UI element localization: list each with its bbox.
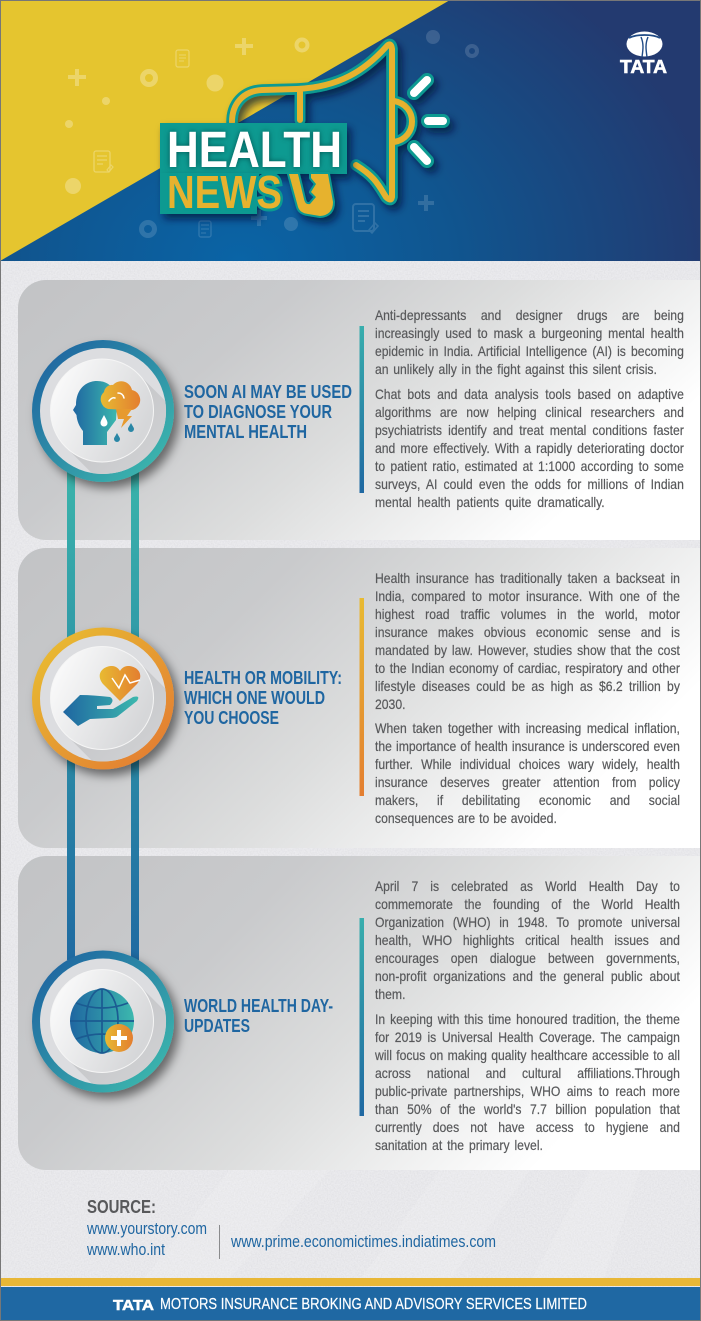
text: mobility paragraph 2: When taken together with increasing medical inflation, <box>375 720 680 736</box>
text: mental health paragraph 2: psychiatrists identify and treat mental conditions faster <box>375 422 684 438</box>
text: world health day paragraph 2: In keeping with this time honoured tradition, the theme <box>375 1011 680 1027</box>
text: mental health paragraph 1: epidemic in India. Artificial Intelligence (AI) is becoming <box>375 343 684 359</box>
text: world health day paragraph 1: commemorate the founding of the World Health <box>375 896 680 912</box>
text: world health day paragraph 2: than 50% of the world's 7.7 billion population that <box>375 1101 680 1117</box>
icon: head with storm cloud <box>73 381 140 445</box>
decorative icons on yellow <box>65 38 308 194</box>
icon: globe with plus <box>70 989 134 1053</box>
text: mobility paragraph 2: further. While individual choices wary widely, health <box>375 756 680 772</box>
badge: health or mobility <box>32 598 364 796</box>
heading: health or mobility: YOU CHOOSE <box>184 708 279 728</box>
text: mobility paragraph 1 <box>375 570 680 712</box>
text: world health day paragraph 1: non-profit organizations and the general public about <box>375 968 680 984</box>
header banner background <box>0 0 701 261</box>
text: mental health paragraph 2: and more effectively. With a rapidly deteriorating doctor <box>375 440 684 456</box>
heading: world health day: WORLD HEALTH DAY- <box>184 996 333 1016</box>
text: world health day paragraph 2: for 2019 is Universal Health Coverage. The campaign <box>375 1029 680 1045</box>
text: mental health paragraph 2: to patient ratio, estimated at 1:1000 according to some <box>375 458 684 474</box>
text: world health day paragraph 1: April 7 is celebrated as World Health Day to <box>375 878 680 894</box>
icon: megaphone handle <box>289 174 333 216</box>
connector rails <box>67 470 139 960</box>
text: world health day paragraph 1: Organization (WHO) in 1948. To promote universal <box>375 914 680 930</box>
text: mental health paragraph 2: surveys, AI could even the odds for millions of Indian <box>375 476 684 492</box>
footer bar: MOTORS INSURANCE BROKING AND ADVISORY SERVICES LIMITED <box>160 1296 587 1313</box>
source list: www.yourstory.com <box>86 1220 207 1238</box>
text: mental health paragraph 2: mental health patients quite dramatically. <box>375 494 605 510</box>
icon: hand holding heart <box>63 666 140 726</box>
text: mental health paragraph 2: Chat bots and data analysis tools based on adaptive <box>375 386 684 402</box>
footer bar: TATA <box>113 1297 154 1314</box>
source list <box>86 1197 496 1259</box>
text: mental health paragraph 1: increasingly used to mask a burgeoning mental health <box>375 325 684 341</box>
text: mobility paragraph 1: lifestyle diseases could be as high as $6.2 trillion by <box>375 678 680 694</box>
accent bar <box>360 598 364 796</box>
accent bar <box>360 918 364 1116</box>
title: health news <box>160 121 347 218</box>
panel 3 background <box>18 856 701 1170</box>
heading: world health day: UPDATES <box>184 1016 250 1036</box>
text: mobility paragraph 1: insurance makes obvious economic sense and is <box>375 624 680 640</box>
text: mental health paragraph 1: an unlikely ally in the fight against this silent crisis. <box>375 361 657 377</box>
text: mental health paragraph 2 <box>375 386 684 510</box>
logo: tata <box>620 32 667 77</box>
panel 2 background <box>18 548 701 848</box>
heading: health or mobility: WHICH ONE WOULD <box>184 688 325 708</box>
text: world health day paragraph 1: health, WHO highlights critical health issues and <box>375 932 680 948</box>
icon: megaphone <box>232 44 412 199</box>
text: mobility paragraph 1: highest road traffic volumes in the world, motor <box>375 606 680 622</box>
title: health news: HEALTH <box>167 121 342 178</box>
decorative icons on blue <box>142 30 477 237</box>
text: mobility paragraph 1: India, compared to motor insurance. With one of the <box>375 588 680 604</box>
badge: mental health <box>32 326 364 493</box>
icon: sound waves <box>414 80 443 161</box>
text: world health day paragraph 2 <box>374 1011 680 1154</box>
heading: health or mobility: HEALTH OR MOBILITY: <box>184 668 342 688</box>
heading: world health day <box>184 996 333 1036</box>
source list: www.who.int <box>86 1241 165 1259</box>
badge: world health day <box>32 918 364 1116</box>
text: mobility paragraph 2 <box>375 720 680 826</box>
source list: www.prime.economictimes.indiatimes.com <box>230 1233 496 1251</box>
panel 1 background <box>18 280 701 540</box>
footer bar <box>0 1278 701 1321</box>
text: mental health paragraph 1: Anti-depressants and designer drugs are being <box>375 307 684 323</box>
text: mental health paragraph 1 <box>375 307 684 378</box>
heading: soon ai: MENTAL HEALTH <box>184 422 307 442</box>
text: world health day paragraph 2: sanitation at the primary level. <box>375 1137 543 1153</box>
text: mobility paragraph 2: the importance of health insurance is underscored even <box>375 738 680 754</box>
text: mobility paragraph 2: consequences are to be avoided. <box>375 810 557 826</box>
text: mobility paragraph 1: to the Indian economy of cardiac, respiratory and other <box>375 660 680 676</box>
heading: soon ai: TO DIAGNOSE YOUR <box>184 402 332 422</box>
text: world health day paragraph 2: across national and cultural affiliations.Through <box>375 1065 680 1081</box>
heading: soon ai <box>184 382 352 442</box>
accent bar <box>360 326 364 493</box>
heading: health or mobility <box>184 668 342 728</box>
text: mobility paragraph 2: makers, if debilitating economic and social <box>375 792 680 808</box>
text: world health day paragraph 2: will focus on making quality healthcare accessible to all <box>375 1047 680 1063</box>
text: mental health paragraph 2: algorithms are now helping clinical researchers and <box>375 404 684 420</box>
text: mobility paragraph 1: 2030. <box>375 696 405 712</box>
text: world health day paragraph 2: public-private partnerships, WHO aims to reach more <box>375 1083 680 1099</box>
text: mobility paragraph 1: mandated by law. However, studies show that the cost <box>375 642 680 658</box>
text: world health day paragraph 2: currently does not have access to hygiene and <box>375 1119 680 1135</box>
heading: soon ai: SOON AI MAY BE USED <box>184 382 352 402</box>
text: mobility paragraph 2: insurance deserves greater attention from policy <box>375 774 680 790</box>
text: world health day paragraph 1: them. <box>375 986 405 1002</box>
text: mobility paragraph 1: Health insurance has traditionally taken a backseat in <box>375 570 680 586</box>
logo: tata: TATA <box>620 57 667 77</box>
text: world health day paragraph 1: encourages open dialogue between governments, <box>375 950 680 966</box>
text: world health day paragraph 1 <box>375 878 680 1002</box>
title: health news: NEWS <box>167 166 282 218</box>
source list: SOURCE: <box>87 1197 156 1217</box>
